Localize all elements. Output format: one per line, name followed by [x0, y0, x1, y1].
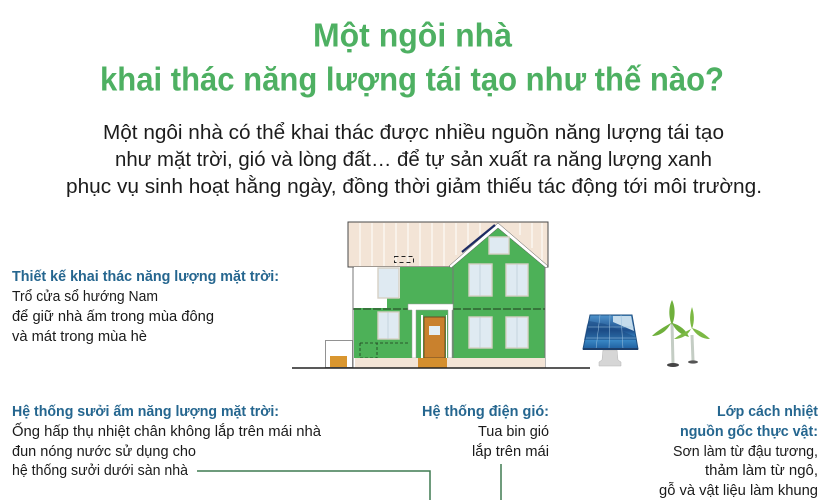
roof vent	[394, 256, 414, 262]
illustration: house	[292, 222, 590, 368]
foundation	[355, 358, 545, 368]
intro text: phục vụ sinh hoạt hằng ngày, đồng thời giảm thiếu tác động tới môi trường.	[66, 175, 762, 198]
callout: solar heating: Ống hấp thụ nhiệt chân không lắp trên mái nhà	[12, 422, 322, 440]
porch	[408, 304, 453, 358]
callout: wind power: Hệ thống điện gió:	[422, 403, 549, 420]
callout: solar design: và mát trong mùa hè	[12, 328, 147, 345]
title: Một ngôi nhà	[313, 16, 513, 54]
callout: solar design: để giữ nhà ấm trong mùa đông	[12, 308, 214, 325]
leader line: wind power	[500, 464, 502, 500]
callout: plant-based insulation: nguồn gốc thực vật:	[680, 423, 818, 440]
icon: wind turbines	[652, 300, 710, 367]
callout: plant-based insulation: gỗ và vật liệu làm khung	[659, 482, 818, 499]
intro text	[66, 121, 762, 198]
callout: wind power: lắp trên mái	[472, 443, 549, 460]
callout: plant-based insulation: Lớp cách nhiệt	[717, 403, 818, 420]
windows	[378, 237, 528, 348]
icon: solar panel	[583, 315, 638, 366]
title	[100, 16, 724, 98]
gable trim	[449, 223, 548, 268]
callout: plant-based insulation: Sơn làm từ đậu tương,	[673, 443, 818, 460]
callout: wind power: Tua bin gió	[478, 423, 549, 440]
intro text: như mặt trời, gió và lòng đất… để tự sản xuất ra năng lượng xanh	[115, 148, 712, 171]
callout: wind power	[422, 403, 549, 460]
title: khai thác năng lượng tái tạo như thế nào?	[100, 60, 724, 98]
callout: plant-based insulation: thảm làm từ ngô,	[705, 462, 818, 479]
green wall cladding	[354, 226, 545, 358]
callout: solar design: Trổ cửa sổ hướng Nam	[12, 288, 158, 305]
callout: solar heating: Hệ thống sưởi ấm năng lượng mặt trời:	[12, 403, 279, 420]
callout: solar heating: hệ thống sưởi dưới sàn nhà	[12, 462, 189, 479]
callout: solar design: Thiết kế khai thác năng lượng mặt trời:	[12, 268, 279, 285]
callout: solar design	[12, 268, 279, 345]
leader line: solar heating	[197, 471, 430, 500]
left wing wall	[354, 267, 450, 309]
callout: solar heating: đun nóng nước sử dụng cho	[12, 443, 196, 460]
callout: plant-based insulation	[659, 403, 818, 499]
callout: solar heating	[12, 403, 322, 479]
intro text: Một ngôi nhà có thể khai thác được nhiều nguồn năng lượng tái tạo	[103, 121, 724, 144]
